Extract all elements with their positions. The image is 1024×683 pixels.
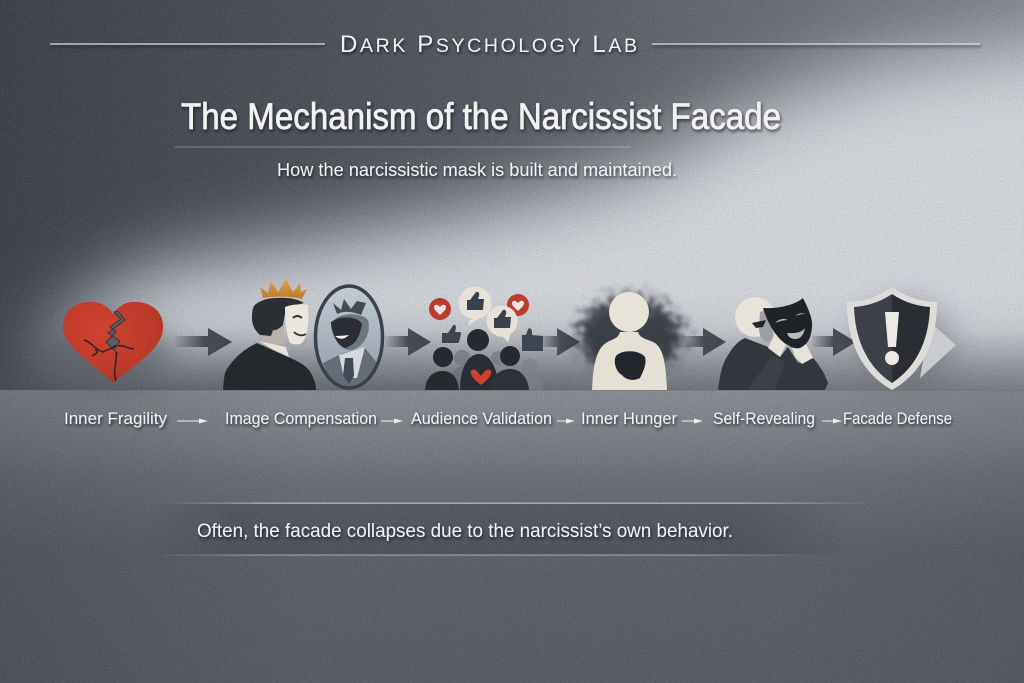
step labels xyxy=(64,409,952,428)
arrow 4 xyxy=(680,328,726,356)
step labels: Inner Fragility xyxy=(64,409,167,428)
footer note: Often, the facade collapses due to the narcissist’s own behavior. xyxy=(197,521,733,542)
step labels: Self-Revealing xyxy=(713,409,815,428)
step labels: Audience Validation xyxy=(411,409,552,428)
step labels: Inner Hunger xyxy=(581,409,677,428)
icon: oval mirror with reflection xyxy=(316,286,382,388)
footer rules xyxy=(158,502,875,556)
icon: broken heart xyxy=(55,302,171,386)
floor horizon line xyxy=(0,390,1024,392)
arrow 3 xyxy=(540,328,580,356)
icon: audience with likes xyxy=(425,286,544,390)
arrow 2 xyxy=(385,328,431,356)
small arrows between labels xyxy=(177,418,842,424)
icon: person removing mask xyxy=(718,297,828,390)
title rule xyxy=(175,146,630,148)
subtitle: How the narcissistic mask is built and maintained. xyxy=(277,160,677,180)
arrow 5 xyxy=(812,328,856,356)
icon: hollow figure in dark cloud xyxy=(578,292,682,390)
step labels: Facade Defense xyxy=(843,409,952,428)
icon: shield with exclamation xyxy=(847,287,956,390)
header: Dark Psychology Lab: DARK PSYCHOLOGY LAB xyxy=(340,31,637,58)
title: The Mechanism of the Narcissist Facade xyxy=(181,96,781,137)
arrow 1 xyxy=(175,328,232,356)
icon: masked man with crown xyxy=(223,279,316,390)
step labels: Image Compensation xyxy=(225,409,377,428)
